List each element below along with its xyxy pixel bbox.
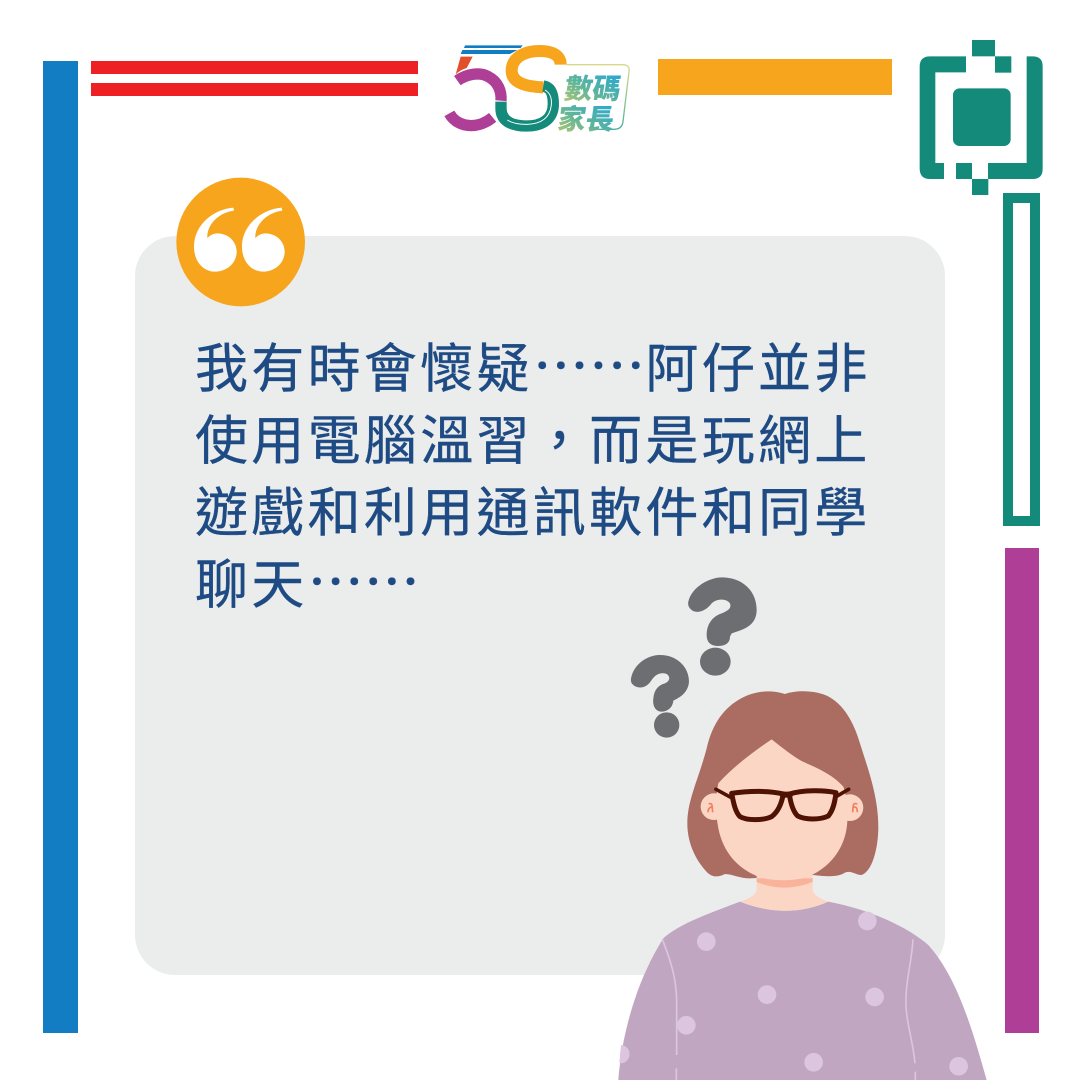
icon: large question mark <box>688 577 757 676</box>
bar: purple right <box>1005 548 1039 1033</box>
logo: 55 digital parents: 數碼 <box>562 74 623 105</box>
panel: grey quote background <box>135 236 945 975</box>
bar: orange top <box>658 59 892 95</box>
glasses <box>716 789 849 820</box>
sweater seams <box>662 939 915 1080</box>
icon: small question mark <box>631 655 689 738</box>
ears <box>701 793 727 820</box>
text: parent's quote: 使用電腦溫習，而是玩網上 <box>195 412 871 471</box>
bar: teal outlined right <box>1003 193 1040 526</box>
bar: blue left <box>43 61 78 1033</box>
sweater dots <box>619 912 968 1076</box>
sweater <box>618 902 987 1080</box>
text: parent's quote: 遊戲和利用通訊軟件和同學 <box>195 484 871 543</box>
text: parent's quote <box>195 336 871 615</box>
face <box>716 739 848 880</box>
logo: 55 digital parents: 家長 <box>556 103 616 135</box>
neck <box>740 875 828 911</box>
bar: red double top <box>91 61 418 96</box>
text: parent's quote: 我有時會懷疑⋯⋯阿仔並非 <box>195 336 871 399</box>
text: parent's quote: 聊天⋯⋯ <box>195 552 420 615</box>
hair <box>687 691 878 878</box>
neck shadow <box>757 878 813 888</box>
